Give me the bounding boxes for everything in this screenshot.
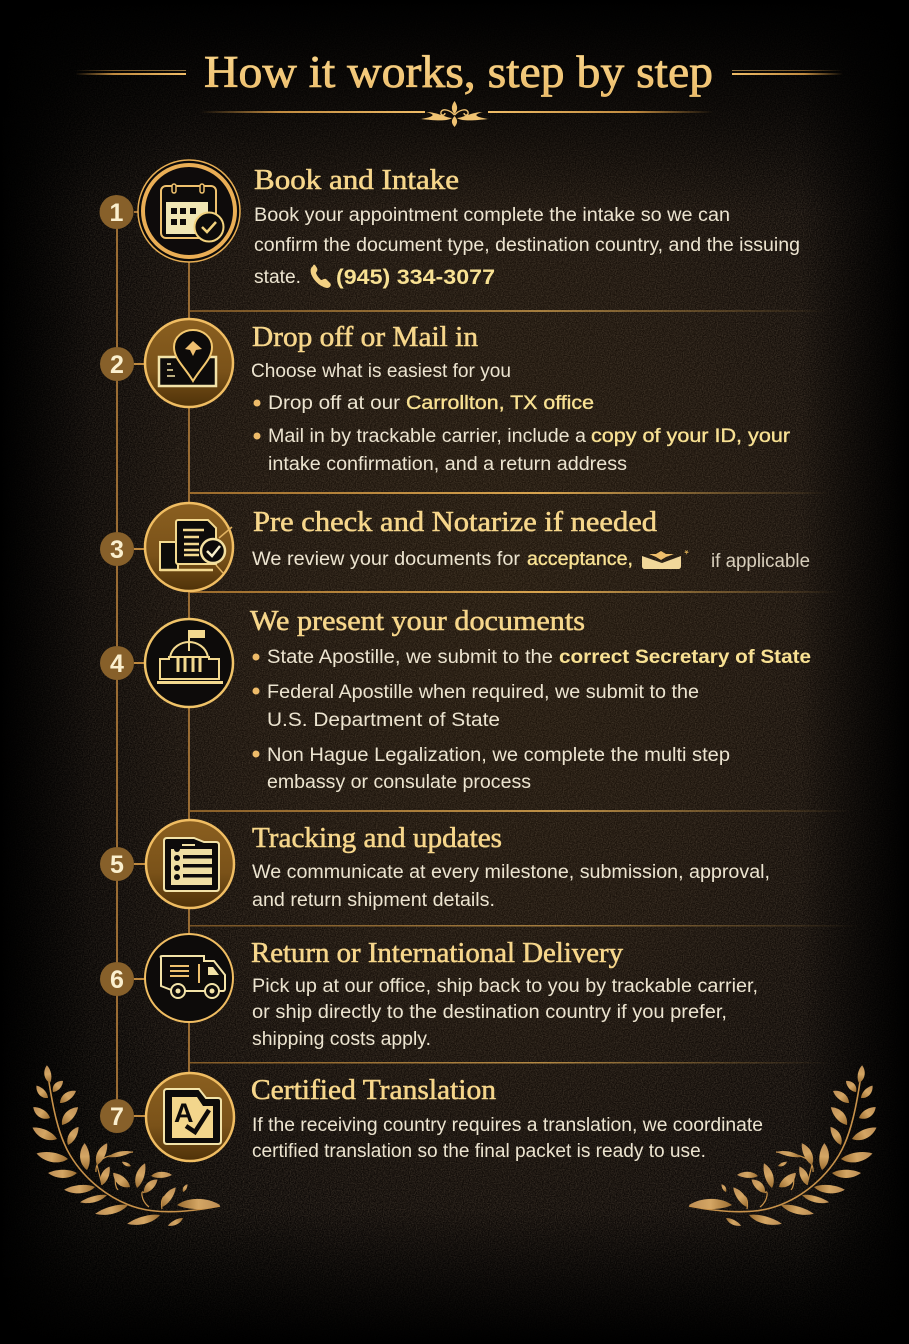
step 5 bbox=[100, 820, 770, 911]
body text: confirm the document type, destination country, and the issuing bbox=[254, 235, 800, 256]
step 3 bbox=[100, 503, 810, 591]
number badge 6 bbox=[100, 962, 146, 996]
heading: We present your documents bbox=[250, 606, 585, 637]
body text: or ship directly to the destination country if you prefer, bbox=[252, 1002, 727, 1023]
phone number: (945) 334-3077 bbox=[336, 266, 495, 289]
body text: Book your appointment complete the intake so we can bbox=[254, 205, 730, 226]
number badge 4: 4 bbox=[110, 650, 124, 678]
body text bbox=[254, 205, 800, 289]
number badge 1 bbox=[100, 195, 140, 229]
body text: state. bbox=[254, 267, 301, 288]
number badge 2: 2 bbox=[110, 351, 124, 379]
heading: Pre check and Notarize if needed bbox=[253, 507, 657, 538]
icon: phone bbox=[311, 265, 331, 288]
number badge 3 bbox=[100, 532, 146, 566]
body text bbox=[252, 549, 810, 572]
body text: Carrollton, TX office bbox=[406, 393, 594, 414]
icon: delivery truck bbox=[145, 934, 233, 1022]
number badge 5 bbox=[100, 847, 146, 881]
body text: if applicable bbox=[711, 551, 810, 572]
body text bbox=[252, 647, 811, 793]
icon: translation document: A bbox=[174, 1098, 194, 1128]
icon: checklist bbox=[146, 820, 234, 908]
body text: Pick up at our office, ship back to you by trackable carrier, bbox=[252, 976, 758, 997]
icon: document check bbox=[145, 503, 233, 591]
body text: We review your documents for bbox=[252, 549, 521, 570]
step 4 bbox=[100, 606, 811, 793]
body text bbox=[252, 1115, 763, 1162]
number badge 4 bbox=[100, 646, 146, 680]
body text: Federal Apostille when required, we submit to the bbox=[267, 682, 699, 703]
title right rule bbox=[732, 70, 843, 75]
body text: Choose what is easiest for you bbox=[251, 361, 511, 382]
heading: Tracking and updates bbox=[252, 823, 502, 854]
number badge 7: 7 bbox=[110, 1103, 124, 1131]
number badge 5: 5 bbox=[110, 851, 124, 879]
step 2 bbox=[100, 319, 791, 475]
step 7 bbox=[100, 1073, 763, 1162]
body text: Mail in by trackable carrier, include a bbox=[268, 426, 586, 447]
heading: Drop off or Mail in bbox=[252, 322, 478, 353]
number badge 6: 6 bbox=[110, 966, 124, 994]
body text: Drop off at our bbox=[268, 393, 401, 414]
number badge 1: 1 bbox=[110, 199, 124, 227]
number badge 2 bbox=[100, 347, 146, 381]
step 6 bbox=[100, 934, 758, 1050]
number badge 3: 3 bbox=[110, 536, 124, 564]
title ornament bbox=[200, 101, 713, 127]
body text: and return shipment details. bbox=[252, 890, 495, 911]
icon: envelope seal bbox=[642, 550, 689, 569]
title: How it works, step by step bbox=[204, 47, 713, 97]
body text bbox=[251, 361, 791, 475]
icon: translation document bbox=[146, 1073, 234, 1161]
icon: calendar bbox=[138, 160, 240, 262]
body text: acceptance, bbox=[527, 549, 633, 570]
body text bbox=[252, 862, 770, 911]
body text: Non Hague Legalization, we complete the multi step bbox=[267, 745, 730, 766]
body text: embassy or consulate process bbox=[267, 772, 531, 793]
body text: We communicate at every milestone, submission, approval, bbox=[252, 862, 770, 883]
title left rule bbox=[75, 70, 186, 75]
body text: shipping costs apply. bbox=[252, 1029, 431, 1050]
body text bbox=[252, 976, 758, 1050]
body text: certified translation so the final packet is ready to use. bbox=[252, 1141, 706, 1162]
body text: State Apostille, we submit to the bbox=[267, 647, 553, 668]
dividers bbox=[190, 310, 860, 1064]
heading: Certified Translation bbox=[251, 1075, 496, 1106]
right laurel bbox=[689, 1065, 879, 1228]
heading: Book and Intake bbox=[254, 165, 459, 196]
body text: copy of your ID, your bbox=[591, 426, 791, 447]
heading: Return or International Delivery bbox=[251, 938, 623, 969]
body text: U.S. Department of State bbox=[267, 710, 500, 731]
icon: map pin bbox=[145, 319, 233, 407]
icon connector rail bbox=[188, 258, 190, 1075]
body text: intake confirmation, and a return address bbox=[268, 454, 627, 475]
body text: If the receiving country requires a translation, we coordinate bbox=[252, 1115, 763, 1136]
body text: correct Secretary of State bbox=[559, 647, 811, 668]
icon: capitol building bbox=[145, 619, 233, 707]
number badge 7 bbox=[100, 1099, 146, 1133]
step 1 bbox=[100, 160, 800, 289]
left timeline rail bbox=[116, 225, 118, 1105]
left laurel bbox=[30, 1065, 220, 1228]
